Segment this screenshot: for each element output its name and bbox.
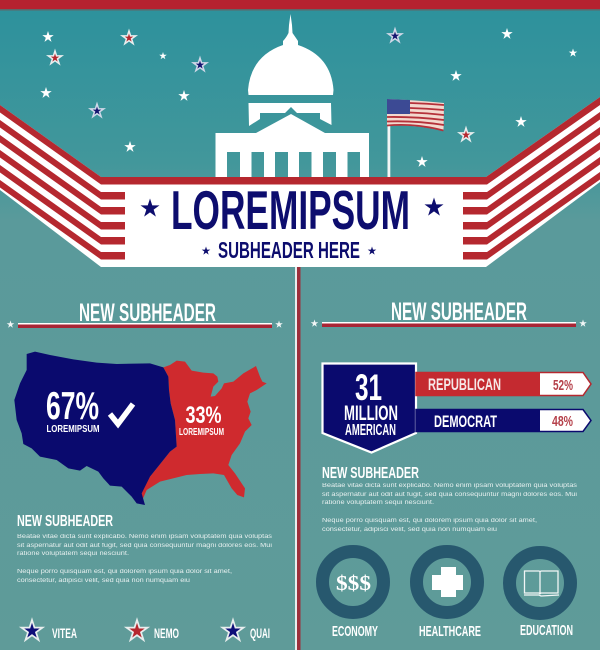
bar: republican: 52%	[553, 378, 573, 394]
map: red east	[140, 361, 267, 502]
right body text block: Beatae vitae dicta sunt explicabo. Nemo enim ipsam voluptatem quia voluptas	[322, 483, 577, 489]
right body text block: NEW SUBHEADER	[322, 465, 419, 482]
right body text block: sit aspernatur aut odit aut fugit, sed quia consequuntur magni dolores eos. Mui	[322, 492, 577, 498]
bar: republican	[416, 372, 591, 396]
banner	[0, 97, 600, 267]
shield: 31 million american: 31	[355, 367, 382, 408]
stat: 33%	[179, 402, 224, 438]
shield: 31 million american: AMERICAN	[345, 422, 396, 439]
bar: democrat: DEMOCRAT	[434, 412, 497, 431]
icon: capitol building	[216, 14, 369, 177]
right banner stripes	[463, 112, 600, 260]
icon: check mark	[110, 404, 133, 424]
icon: american flag	[387, 99, 444, 177]
legend	[22, 620, 270, 641]
right body text block: ratione voluptatem sequi nesciunt.	[322, 500, 434, 506]
label: healthcare: HEALTHCARE	[419, 623, 481, 640]
stat: 33%: 33%	[186, 402, 222, 429]
label: economy: ECONOMY	[332, 623, 378, 640]
left body text block: sit aspernatur aut odit aut fugit, sed quia consequuntur magni dolores eos. Mui	[17, 543, 272, 549]
bar: republican: REPUBLICAN	[428, 376, 501, 394]
left section heading: NEW SUBHEADER	[79, 299, 216, 327]
shield: 31 million american	[322, 364, 416, 452]
left banner stripes	[0, 120, 125, 260]
left body text block: Beatae vitae dicta sunt explicabo. Nemo enim ipsam voluptatem quia voluptas	[17, 534, 272, 540]
bar: democrat: 48%	[552, 414, 573, 430]
stat: 33%: LOREMIPSUM	[179, 427, 224, 438]
map: blue west	[14, 352, 177, 505]
top red bar	[0, 0, 600, 10]
right body text block: Neque porro quisquam est, qui dolorem ipsum quia dolor sit amet,	[322, 518, 537, 524]
bar: democrat	[416, 409, 591, 432]
stat: 67%: LOREMIPSUM	[46, 424, 100, 435]
left body text block: Neque porro quisquam est, qui dolorem ipsum quia dolor sit amet,	[17, 569, 232, 575]
left body text block: consectetur, adipisci velit, sed quia non numquam eiu	[17, 578, 190, 584]
icon: healthcare	[416, 552, 478, 612]
stat: 67%	[46, 385, 100, 435]
subtitle: SUBHEADER HERE	[218, 237, 360, 263]
icon: education	[510, 552, 570, 614]
us map	[14, 352, 267, 505]
right body text block: consectetur, adipisci velit, sed quia non numquam eiu	[322, 527, 497, 533]
left section heading	[7, 299, 283, 328]
title: LOREMIPSUM	[171, 179, 410, 241]
center divider	[295, 267, 300, 650]
legend: QUAI	[250, 626, 270, 641]
left body text block: ratione voluptatem sequi nesciunt.	[17, 551, 129, 557]
right body text block	[322, 465, 577, 533]
left body text block	[17, 513, 272, 584]
banner stars	[140, 198, 444, 255]
icon: economy: $$$	[336, 571, 371, 595]
scattered stars	[40, 28, 577, 167]
right section heading	[311, 298, 587, 327]
icon: economy	[322, 552, 384, 612]
left body text block: NEW SUBHEADER	[17, 513, 113, 530]
legend: VITEA	[52, 626, 77, 641]
shield: 31 million american: MILLION	[344, 402, 398, 425]
stat: 67%: 67%	[46, 385, 99, 428]
legend: NEMO	[154, 626, 179, 641]
